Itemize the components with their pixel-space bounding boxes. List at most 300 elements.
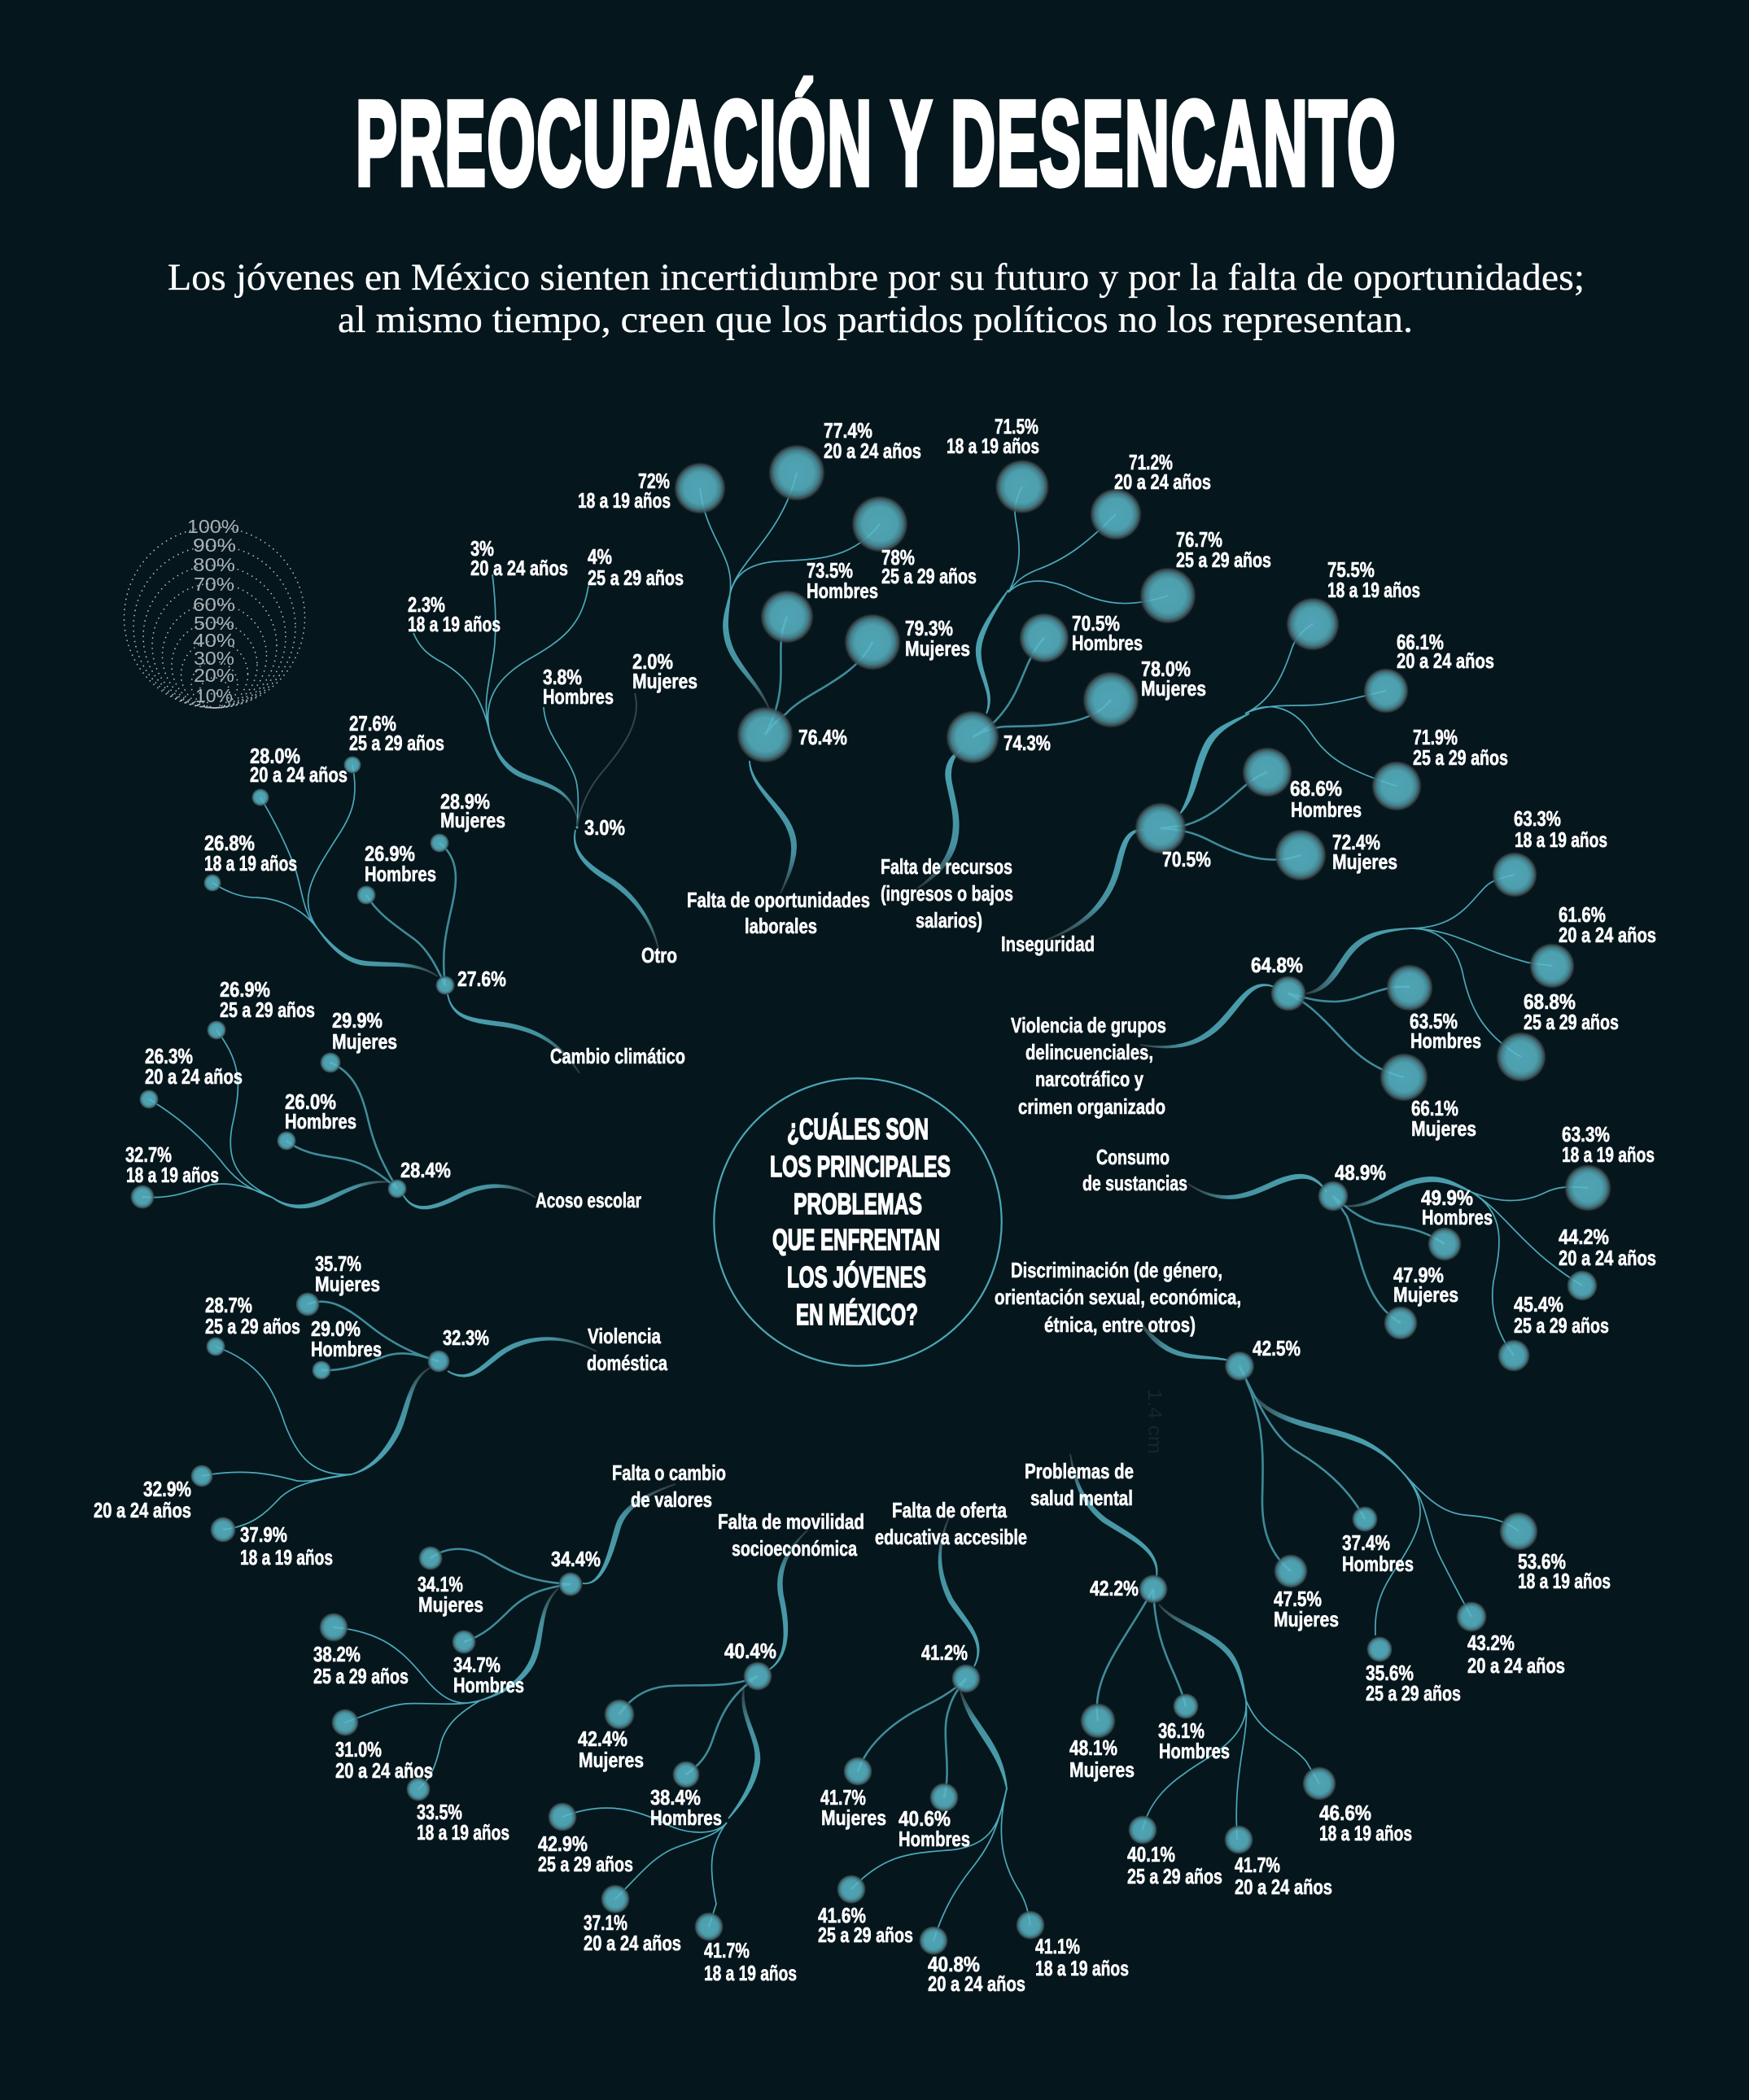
node: 32.7% 18 a 19 años: 32.7% [125, 1142, 172, 1167]
legend: dotted circles scale: 90% [193, 535, 236, 556]
center circle question: ¿CUÁLES SON [787, 1112, 929, 1146]
label: 2.0% Mujeres: Mujeres [632, 669, 697, 693]
node: 26.9% 25 a 29 años: 25 a 29 años [220, 998, 315, 1022]
node: 26.9% Hombres: 26.9% [365, 841, 415, 866]
node: 78% 25 a 29 años: 25 a 29 años [881, 564, 977, 588]
node: 78% 25 a 29 años [851, 496, 977, 588]
node: total 34.4%: 34.4% [551, 1547, 601, 1571]
node: 63.5% Hombres: 63.5% [1410, 1009, 1458, 1033]
node: 78.0% Mujeres: 78.0% [1141, 657, 1191, 681]
node: 66.1% Mujeres: 66.1% [1411, 1096, 1458, 1120]
legend: dotted circles scale: 10% [195, 685, 233, 706]
branches [1188, 1175, 1588, 1356]
label: 4% 25 a 29 años [588, 544, 684, 590]
problem label: delincuenciales, [1025, 1040, 1153, 1064]
node: 26.0% Hombres [277, 1089, 356, 1150]
problem label: orientación sexual, económica, [995, 1285, 1241, 1309]
node: 63.3% 18 a 19 años [1492, 806, 1607, 897]
node: 49.9% Hombres: Hombres [1422, 1205, 1493, 1229]
node: 35.6% 25 a 29 años [1366, 1636, 1461, 1705]
node: 77.4% 20 a 24 años: 77.4% [824, 418, 872, 443]
legend: dotted circles scale: 30% [194, 648, 234, 669]
node: 70.5% Hombres [1019, 611, 1143, 663]
node: 41.7% 18 a 19 años: 18 a 19 años [704, 1961, 797, 1985]
node: 29.0% Hombres: 29.0% [311, 1316, 361, 1341]
node: 35.7% Mujeres: 35.7% [315, 1251, 361, 1276]
node: 68.8% 25 a 29 años: 68.8% [1524, 989, 1576, 1014]
problem label: salud mental [1030, 1486, 1133, 1510]
label: 3.8% Hombres [543, 665, 614, 709]
node: 41.7% 18 a 19 años: 41.7% [704, 1938, 750, 1962]
node: 53.6% 18 a 19 años: 18 a 19 años [1518, 1569, 1611, 1593]
problem label [995, 1258, 1241, 1337]
node: total 3.0%: 3.0% [584, 815, 625, 840]
node: 48.1% Mujeres [1069, 1703, 1135, 1782]
branches [1140, 875, 1552, 1077]
node: 31.0% 20 a 24 años [331, 1709, 433, 1783]
subtitle: Los jóvenes en México sienten incertidumbre por su futuro y por la falta de oportunidades; [168, 256, 1585, 299]
node: 40.1% 25 a 29 años [1127, 1815, 1222, 1888]
node: total 27.6%: 27.6% [457, 967, 506, 991]
node: 46.6% 18 a 19 años: 18 a 19 años [1319, 1821, 1412, 1845]
node: 45.4% 25 a 29 años [1498, 1292, 1609, 1372]
problem label [1011, 1013, 1166, 1119]
node: 26.0% Hombres: Hombres [285, 1109, 356, 1133]
tree: Cambio climático [203, 711, 685, 1073]
node: 41.1% 18 a 19 años: 41.1% [1035, 1934, 1080, 1958]
node: 79.3% Mujeres: Mujeres [905, 636, 970, 661]
node: 26.8% 18 a 19 años: 18 a 19 años [204, 851, 297, 875]
node: 45.4% 25 a 29 años: 45.4% [1514, 1292, 1563, 1316]
node: 42.9% 25 a 29 años: 25 a 29 años [538, 1852, 633, 1876]
label: 3.8% Hombres: 3.8% [543, 665, 582, 689]
node: 68.8% 25 a 29 años: 25 a 29 años [1524, 1010, 1619, 1034]
problem label: Falta o cambio [612, 1460, 726, 1485]
node: 26.3% 20 a 24 años [139, 1044, 243, 1109]
legend: dotted circles scale: 20% [194, 665, 234, 686]
node: 40.8% 20 a 24 años [919, 1926, 1025, 1996]
problem label [587, 1324, 667, 1375]
node: 38.4% Hombres [650, 1761, 722, 1830]
problem label: Otro [641, 943, 677, 967]
node: 41.7% 20 a 24 años: 20 a 24 años [1235, 1875, 1332, 1899]
node: 34.7% Hombres [452, 1630, 524, 1697]
problem label: Inseguridad [1001, 932, 1095, 956]
center circle question: PROBLEMAS [794, 1187, 922, 1220]
node: 72.4% Mujeres: Mujeres [1332, 849, 1397, 874]
node: total 48.9%: 48.9% [1335, 1160, 1386, 1185]
tree: Inseguridad [1001, 557, 1508, 956]
node: 40.6% Hombres: 40.6% [899, 1806, 951, 1831]
problem label: Discriminación (de género, [1011, 1258, 1222, 1282]
problem label: crimen organizado [1018, 1094, 1165, 1119]
node: total 40.4%: 40.4% [724, 1639, 776, 1663]
node: total 48.9% [1318, 1160, 1386, 1212]
node: total 42.5% [1224, 1336, 1301, 1382]
node: 42.4% Mujeres [578, 1699, 644, 1772]
node: 44.2% 20 a 24 años: 20 a 24 años [1559, 1246, 1656, 1270]
label: 2.3% 18 a 19 años: 18 a 19 años [408, 612, 501, 636]
node: 75.5% 18 a 19 años [1286, 557, 1420, 651]
legend: dotted circles scale: 80% [193, 554, 235, 575]
problem label: Violencia de grupos [1011, 1013, 1166, 1037]
problem label: Acoso escolar [536, 1188, 641, 1212]
node: 27.6% 25 a 29 años: 27.6% [349, 711, 396, 736]
label: 3.8% Hombres: Hombres [543, 684, 614, 709]
node: total 34.4% [551, 1547, 601, 1596]
tree: Falta de movilidad socioeconómica [538, 1509, 864, 1985]
node: 68.6% Hombres [1242, 747, 1362, 822]
branches [562, 1530, 808, 1927]
branches [917, 487, 1168, 888]
node: total 32.3% [427, 1325, 489, 1373]
node: total 42.5%: 42.5% [1253, 1336, 1301, 1360]
node: total 28.4% [387, 1158, 451, 1198]
subtitle: al mismo tiempo, creen que los partidos políticos no los representan. [338, 299, 1413, 341]
problem label: educativa accesible [875, 1525, 1027, 1549]
node: 40.1% 25 a 29 años: 25 a 29 años [1127, 1864, 1222, 1888]
node: 42.4% Mujeres: 42.4% [578, 1727, 627, 1751]
center circle question: QUE ENFRENTAN [772, 1223, 940, 1256]
node: 41.1% 18 a 19 años: 18 a 19 años [1035, 1956, 1129, 1980]
problem label: Falta de movilidad [718, 1509, 864, 1534]
node: 41.7% 18 a 19 años [694, 1912, 797, 1985]
node: 76.7% 25 a 29 años: 25 a 29 años [1176, 548, 1271, 572]
subtitle [168, 256, 1585, 341]
node: total 64.8%: 64.8% [1251, 953, 1303, 977]
problem label: laborales [745, 914, 817, 938]
node: 37.4% Hombres: 37.4% [1342, 1530, 1390, 1555]
problem label: (ingresos o bajos [881, 881, 1013, 906]
node: 41.7% 20 a 24 años: 41.7% [1235, 1853, 1280, 1877]
branches [700, 473, 880, 893]
node: total 27.6% [435, 967, 506, 995]
node: 61.6% 20 a 24 años [1529, 902, 1656, 989]
node: 41.6% 25 a 29 años [818, 1875, 913, 1947]
legend: dotted circles scale: 40% [193, 630, 235, 651]
node: 34.7% Hombres: 34.7% [453, 1652, 501, 1677]
node: 26.8% 18 a 19 años: 26.8% [204, 831, 255, 855]
problem label [881, 854, 1013, 932]
label: 3% 20 a 24 años: 3% [470, 536, 494, 561]
tree: Falta de recursos [881, 414, 1271, 932]
node: 47.9% Mujeres [1384, 1263, 1458, 1340]
branches [202, 1302, 597, 1530]
node: 28.9% Mujeres [430, 789, 505, 853]
node: 38.2% 25 a 29 años: 38.2% [313, 1642, 361, 1666]
node: 33.5% 18 a 19 años [406, 1777, 509, 1845]
legend: dotted circles scale: 60% [193, 594, 235, 615]
node: 48.1% Mujeres: Mujeres [1069, 1757, 1135, 1782]
node: 71.2% 20 a 24 años: 20 a 24 años [1114, 469, 1211, 494]
node: 71.5% 18 a 19 años: 18 a 19 años [947, 434, 1039, 458]
node: 37.9% 18 a 19 años: 37.9% [240, 1522, 287, 1547]
node: 32.7% 18 a 19 años: 18 a 19 años [126, 1163, 219, 1187]
node: 71.2% 20 a 24 años: 71.2% [1129, 450, 1173, 474]
problem label: de valores [631, 1487, 712, 1512]
node: 47.9% Mujeres: Mujeres [1393, 1282, 1458, 1307]
node: 41.6% 25 a 29 años: 41.6% [818, 1903, 866, 1928]
node: 66.1% 20 a 24 años: 66.1% [1397, 630, 1444, 654]
node: total 42.2%: 42.2% [1090, 1576, 1139, 1600]
node: 45.4% 25 a 29 años: 25 a 29 años [1514, 1313, 1609, 1338]
legend: dotted circles scale: 70% [194, 574, 234, 595]
node: 32.9% 20 a 24 años [94, 1465, 213, 1522]
node: total 41.2% [921, 1640, 981, 1693]
problem label [612, 1460, 726, 1512]
branches [1138, 1319, 1519, 1635]
problem label: narcotráfico y [1035, 1067, 1143, 1091]
node: 53.6% 18 a 19 años [1499, 1512, 1611, 1593]
branches [1047, 624, 1397, 940]
node: 63.5% Hombres [1386, 964, 1481, 1053]
node: 47.5% Mujeres [1274, 1554, 1339, 1631]
tree: Violencia de grupos delincuenciales [1011, 806, 1656, 1141]
problem label: Violencia [588, 1324, 661, 1348]
node: 78.0% Mujeres: Mujeres [1141, 676, 1206, 701]
label: 2.0% Mujeres [632, 649, 697, 693]
node: 38.4% Hombres: 38.4% [650, 1785, 701, 1810]
node: total 70.5% [1135, 802, 1211, 871]
branches [334, 1484, 676, 1789]
node: 34.1% Mujeres [418, 1546, 483, 1617]
node: 76.7% 25 a 29 años: 76.7% [1176, 527, 1222, 552]
legend: dotted circles scale: 100% [187, 516, 239, 537]
node: 26.9% 25 a 29 años [207, 977, 315, 1040]
node: 28.7% 25 a 29 años [205, 1293, 300, 1356]
node: 38.2% 25 a 29 años: 25 a 29 años [313, 1664, 409, 1688]
node: 41.6% 25 a 29 años: 25 a 29 años [818, 1923, 913, 1947]
node: 68.6% Hombres: Hombres [1291, 797, 1362, 822]
node: 76.7% 25 a 29 años [1139, 527, 1271, 624]
node: 28.7% 25 a 29 años: 28.7% [205, 1293, 252, 1317]
node: 38.4% Hombres: Hombres [650, 1805, 722, 1830]
node: 75.5% 18 a 19 años: 18 a 19 años [1327, 578, 1420, 602]
node: 77.4% 20 a 24 años [768, 418, 921, 501]
node: 37.9% 18 a 19 años: 18 a 19 años [240, 1545, 333, 1570]
node: 66.1% 20 a 24 años: 20 a 24 años [1397, 648, 1494, 673]
node: 46.6% 18 a 19 años [1302, 1766, 1412, 1845]
node: 28.9% Mujeres: 28.9% [440, 789, 490, 814]
node: 71.9% 25 a 29 años [1371, 725, 1508, 811]
node: 68.8% 25 a 29 años [1496, 989, 1619, 1082]
node: 61.6% 20 a 24 años: 61.6% [1559, 902, 1606, 927]
node: 72.4% Mujeres: 72.4% [1332, 830, 1380, 854]
node: total 76.4%: 76.4% [798, 725, 847, 749]
node: 35.6% 25 a 29 años: 25 a 29 años [1366, 1681, 1461, 1705]
node: 63.3% 18 a 19 años: 18 a 19 años [1515, 827, 1607, 852]
label: 3% 20 a 24 años: 20 a 24 años [470, 556, 568, 580]
node: total 70.5%: 70.5% [1162, 847, 1211, 871]
node: total 42.2% [1090, 1574, 1168, 1604]
node: 68.6% Hombres: 68.6% [1290, 776, 1342, 801]
node: 72.4% Mujeres [1275, 829, 1397, 881]
center circle question: LOS JÓVENES [787, 1260, 926, 1294]
node: 37.4% Hombres: Hombres [1342, 1552, 1414, 1576]
node: 35.7% Mujeres: Mujeres [315, 1272, 380, 1296]
node: 43.2% 20 a 24 años: 20 a 24 años [1467, 1653, 1565, 1678]
node: 40.8% 20 a 24 años: 40.8% [928, 1952, 980, 1976]
node: 29.9% Mujeres [320, 1008, 397, 1073]
node: 34.1% Mujeres: Mujeres [418, 1592, 483, 1617]
node: 29.0% Hombres: Hombres [311, 1337, 382, 1361]
node: 26.8% 18 a 19 años [203, 831, 297, 892]
node: 28.0% 20 a 24 años: 20 a 24 años [250, 762, 348, 787]
node: 63.3% 18 a 19 años: 63.3% [1562, 1122, 1610, 1146]
node: 31.0% 20 a 24 años: 31.0% [335, 1737, 382, 1762]
node: 38.2% 25 a 29 años [313, 1613, 409, 1688]
node: 27.6% 25 a 29 años [343, 711, 444, 774]
problem label: étnica, entre otros) [1044, 1312, 1196, 1337]
problem label [875, 1498, 1027, 1549]
node: 34.7% Hombres: Hombres [453, 1673, 524, 1697]
node: 72% 18 a 19 años: 72% [638, 469, 670, 493]
problem label: doméstica [587, 1351, 667, 1375]
node: 35.6% 25 a 29 años: 35.6% [1366, 1661, 1414, 1685]
tree: Falta de oportunidades laborales [578, 418, 977, 938]
node: 44.2% 20 a 24 años [1559, 1225, 1656, 1301]
node: total 41.2%: 41.2% [921, 1640, 968, 1665]
problem label [1025, 1459, 1134, 1510]
node: total 64.8% [1251, 953, 1306, 1011]
problem label: salarios) [916, 908, 982, 932]
node: 40.1% 25 a 29 años: 40.1% [1127, 1842, 1175, 1866]
node: 63.3% 18 a 19 años: 63.3% [1514, 806, 1561, 831]
node: 41.7% Mujeres: 41.7% [820, 1785, 866, 1810]
label: 3% 20 a 24 años [470, 536, 568, 580]
node: total 40.4% [724, 1639, 776, 1691]
node: 73.5% Hombres [760, 558, 878, 644]
node: 49.9% Hombres: 49.9% [1421, 1185, 1473, 1210]
node: 32.9% 20 a 24 años: 32.9% [143, 1477, 191, 1501]
node: 66.1% Mujeres: Mujeres [1411, 1116, 1476, 1141]
faint measure note: 1.4 cm [1143, 1389, 1165, 1454]
branches [212, 765, 579, 1073]
tree: Consumo de sustancias [1082, 1122, 1656, 1372]
problem label [687, 888, 870, 938]
node: 33.5% 18 a 19 años: 18 a 19 años [417, 1820, 509, 1845]
node: 41.7% Mujeres [820, 1757, 886, 1830]
node: 41.1% 18 a 19 años [1016, 1910, 1129, 1980]
tree: Violencia doméstica [94, 1251, 667, 1570]
node: 77.4% 20 a 24 años: 20 a 24 años [824, 439, 921, 463]
problem label: Falta de recursos [881, 854, 1012, 879]
node: 28.9% Mujeres: Mujeres [440, 808, 505, 832]
center circle question [714, 1078, 1002, 1366]
node: 71.9% 25 a 29 años: 25 a 29 años [1413, 745, 1508, 770]
node: 32.9% 20 a 24 años: 20 a 24 años [94, 1498, 191, 1522]
problem label: socioeconómica [732, 1536, 857, 1561]
branches [851, 1517, 1030, 1941]
tree: Acoso escolar [125, 977, 641, 1212]
problem label [718, 1509, 864, 1561]
node: 42.9% 25 a 29 años [538, 1802, 633, 1876]
node: 36.1% Hombres: Hombres [1159, 1739, 1230, 1763]
node: total 76.4% [737, 706, 847, 763]
problem label: Falta de oportunidades [687, 888, 870, 912]
tree: Otro [408, 536, 697, 967]
center circle question: EN MÉXICO? [796, 1298, 918, 1331]
node: 40.8% 20 a 24 años: 20 a 24 años [928, 1971, 1025, 1996]
node: 35.7% Mujeres [295, 1251, 380, 1316]
branches [142, 1030, 536, 1208]
node: 46.6% 18 a 19 años: 46.6% [1319, 1801, 1371, 1825]
node: 47.9% Mujeres: 47.9% [1393, 1263, 1444, 1287]
tree: Discriminación [995, 1258, 1611, 1705]
center circle question: LOS PRINCIPALES [770, 1150, 951, 1183]
label: 4% 25 a 29 años: 4% [588, 544, 612, 569]
node: 41.7% Mujeres: Mujeres [821, 1805, 886, 1830]
tree: Falta de oferta educativa accesible [818, 1498, 1129, 1996]
node: 42.4% Mujeres: Mujeres [579, 1748, 644, 1772]
problem label: Problemas de [1025, 1459, 1134, 1483]
node: 47.5% Mujeres: 47.5% [1274, 1587, 1322, 1611]
node: 43.2% 20 a 24 años [1456, 1601, 1565, 1678]
node: 34.1% Mujeres: 34.1% [418, 1572, 463, 1596]
node: 36.1% Hombres: 36.1% [1158, 1718, 1205, 1743]
legend: dotted circles scale [124, 516, 304, 708]
label: 2.0% Mujeres: 2.0% [632, 649, 673, 674]
node: 28.0% 20 a 24 años [250, 744, 348, 806]
node: 61.6% 20 a 24 años: 20 a 24 años [1559, 923, 1656, 947]
node: 29.9% Mujeres: 29.9% [332, 1008, 383, 1033]
node: 72% 18 a 19 años [578, 462, 726, 514]
node: total 74.3% [946, 710, 1051, 764]
node: 44.2% 20 a 24 años: 44.2% [1559, 1225, 1609, 1249]
node: 73.5% Hombres: Hombres [807, 578, 878, 603]
node: 27.6% 25 a 29 años: 25 a 29 años [349, 731, 444, 755]
node: 36.1% Hombres [1158, 1693, 1230, 1763]
legend: dotted circles scale: 50% [194, 613, 234, 634]
node: 53.6% 18 a 19 años: 53.6% [1518, 1549, 1566, 1574]
node: 66.1% 20 a 24 años [1363, 630, 1494, 714]
node: 49.9% Hombres [1421, 1185, 1493, 1261]
node: 26.3% 20 a 24 años: 20 a 24 años [145, 1064, 243, 1089]
node: 47.5% Mujeres: Mujeres [1274, 1607, 1339, 1631]
node: 70.5% Hombres: 70.5% [1072, 611, 1120, 635]
problem label [1082, 1145, 1187, 1195]
node: 71.5% 18 a 19 años: 71.5% [995, 414, 1038, 439]
tree: Problemas de salud mental [1025, 1454, 1412, 1899]
node: 42.9% 25 a 29 años: 42.9% [538, 1831, 588, 1856]
node: 26.0% Hombres: 26.0% [285, 1089, 336, 1114]
node: 63.3% 18 a 19 años [1562, 1122, 1655, 1212]
label: 2.3% 18 a 19 años: 2.3% [408, 592, 445, 617]
node: 79.3% Mujeres [844, 613, 970, 670]
problem label: Falta de oferta [892, 1498, 1007, 1522]
node: 31.0% 20 a 24 años: 20 a 24 años [335, 1758, 433, 1783]
node: 66.1% Mujeres [1380, 1053, 1476, 1141]
node: 72% 18 a 19 años: 18 a 19 años [578, 488, 671, 513]
node: 26.3% 20 a 24 años: 26.3% [145, 1044, 193, 1068]
node: 37.1% 20 a 24 años: 37.1% [584, 1910, 627, 1935]
branches [1070, 1454, 1319, 1840]
node: 26.9% Hombres: Hombres [365, 862, 436, 886]
problem label: de sustancias [1082, 1171, 1187, 1195]
node: 79.3% Mujeres: 79.3% [905, 616, 953, 640]
node: 71.2% 20 a 24 años [1090, 450, 1211, 540]
node: 63.5% Hombres: Hombres [1410, 1028, 1481, 1053]
node: 29.0% Hombres [311, 1316, 382, 1380]
node: 43.2% 20 a 24 años: 43.2% [1467, 1631, 1515, 1655]
node: 40.6% Hombres [899, 1783, 970, 1851]
node: 26.9% 25 a 29 años: 26.9% [220, 977, 270, 1002]
node: 75.5% 18 a 19 años: 75.5% [1327, 557, 1375, 582]
label: 4% 25 a 29 años: 25 a 29 años [588, 565, 684, 590]
node: 33.5% 18 a 19 años: 33.5% [417, 1800, 462, 1824]
node: 63.3% 18 a 19 años: 18 a 19 años [1562, 1142, 1655, 1167]
node: 26.9% Hombres [356, 841, 436, 905]
